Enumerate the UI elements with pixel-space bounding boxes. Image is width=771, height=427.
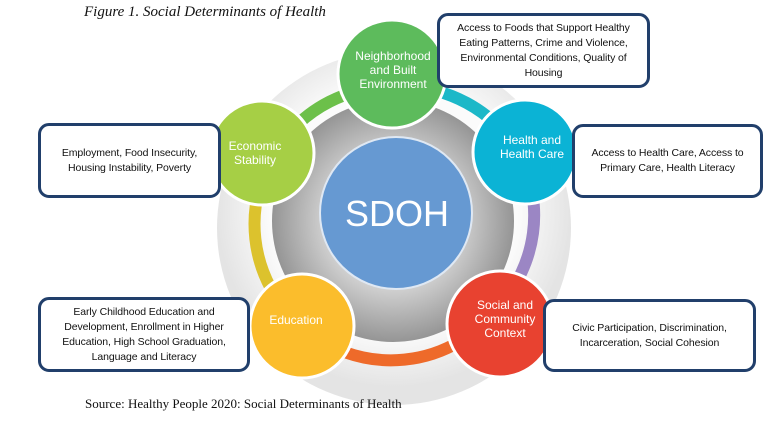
- center circle SDOH: SDOH: [345, 193, 449, 234]
- circle: neighborhood: and Built: [370, 63, 417, 77]
- circle: neighborhood: Environment: [359, 77, 427, 91]
- box: health: [572, 124, 763, 198]
- circle: education: Education: [269, 313, 323, 327]
- box: education: Education, High School Graduation,: [62, 336, 226, 348]
- circle: social: Context: [484, 326, 526, 340]
- box: education: Language and Literacy: [92, 350, 196, 362]
- circle: social: [447, 271, 553, 377]
- box: economic: Employment, Food Insecurity,: [62, 146, 197, 158]
- box: neighborhood: Housing: [525, 66, 562, 78]
- box: health: Access to Health Care, Access to: [591, 147, 744, 159]
- gray disc: [272, 100, 514, 342]
- circle: economic: Economic: [229, 139, 281, 153]
- circle: economic: [210, 101, 314, 205]
- box: neighborhood: Environmental Conditions, Quality of: [460, 52, 627, 64]
- circle: neighborhood: [338, 20, 446, 128]
- box: social: Incarceration, Social Cohesion: [580, 336, 719, 348]
- box: education: Development, Enrollment in Higher: [64, 320, 224, 332]
- title: Figure 1. Social Determinants of Health: [84, 4, 326, 20]
- box: neighborhood: Eating Patterns, Crime and Violence,: [459, 36, 628, 48]
- box: education: Early Childhood Education and: [73, 306, 215, 318]
- source: Source: Healthy People 2020: Social Determinants of Health: [85, 396, 402, 411]
- circle: health: Health and: [503, 133, 561, 147]
- circle: health: Health Care: [500, 147, 564, 161]
- box: health: Primary Care, Health Literacy: [600, 162, 735, 174]
- box: social: [543, 299, 756, 372]
- outer disc: [217, 51, 571, 405]
- box: economic: [38, 123, 221, 198]
- box: education: [38, 297, 250, 372]
- box: neighborhood: [437, 13, 650, 88]
- circle: education: [250, 274, 354, 378]
- circle: health: [473, 100, 577, 204]
- circle: social: Social and: [477, 298, 533, 312]
- circle: economic: Stability: [234, 153, 276, 167]
- box: social: Civic Participation, Discrimination,: [572, 322, 727, 334]
- ring segments: [255, 87, 534, 360]
- box: economic: Housing Instability, Poverty: [68, 162, 191, 174]
- circle: neighborhood: Neighborhood: [355, 49, 431, 63]
- center circle SDOH: [320, 137, 472, 289]
- circle: social: Community: [475, 312, 535, 326]
- box: neighborhood: Access to Foods that Support Healthy: [457, 22, 630, 34]
